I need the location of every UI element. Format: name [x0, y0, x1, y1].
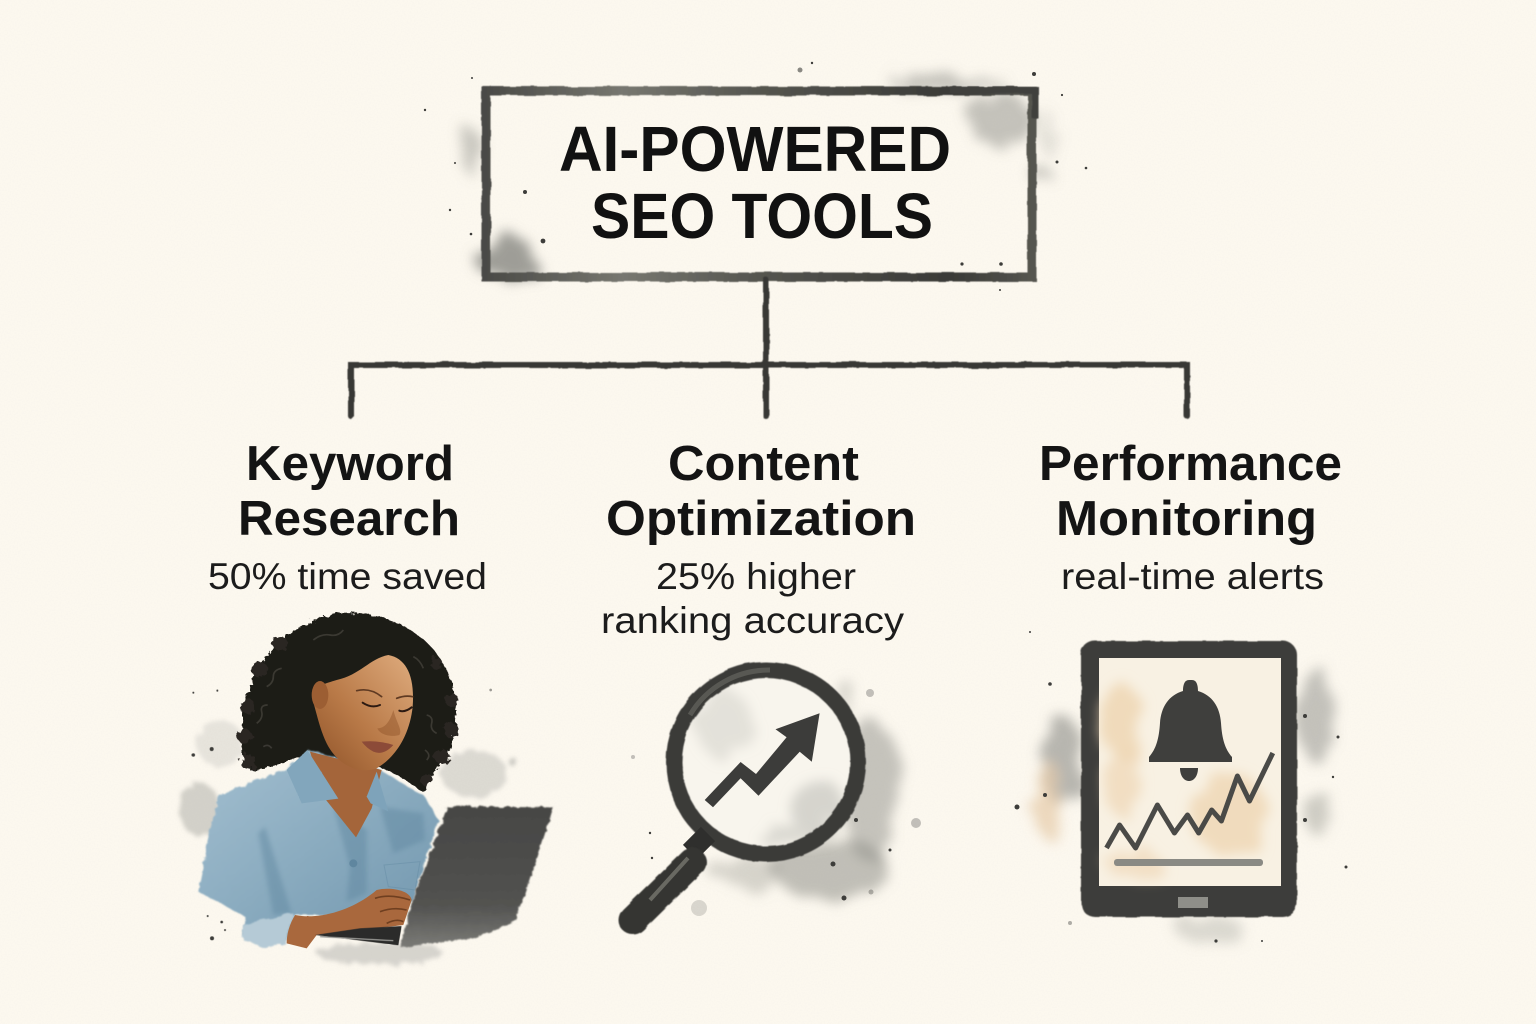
line chart	[1106, 753, 1273, 848]
heading: Monitoring	[1056, 492, 1317, 546]
shirt cuff	[243, 913, 293, 948]
splatter	[631, 689, 921, 916]
screen washes	[1104, 684, 1270, 879]
trend arrow	[705, 713, 820, 807]
lips	[362, 741, 393, 753]
heading: Keyword	[246, 437, 454, 491]
laptop key highlight	[320, 937, 393, 941]
handle	[633, 862, 692, 920]
heading: Research	[238, 492, 460, 546]
stat	[601, 556, 905, 641]
home button	[1178, 897, 1208, 908]
collar	[287, 750, 338, 803]
ring highlight	[690, 670, 770, 715]
title text second line: SEO TOOLS	[591, 180, 933, 252]
title splatter	[424, 62, 1087, 291]
tablet body	[1081, 641, 1297, 917]
shirt	[198, 750, 438, 940]
bell	[1149, 680, 1232, 762]
splatter	[1014, 631, 1348, 943]
hair highlights	[257, 630, 437, 760]
fingers	[375, 896, 410, 923]
title frame	[486, 91, 1032, 277]
title text: AI-POWERED	[559, 113, 951, 185]
heading	[606, 437, 916, 546]
splatter	[192, 689, 492, 940]
bell clapper	[1180, 768, 1198, 781]
ear	[312, 681, 328, 709]
person ink wash	[180, 720, 516, 964]
tablet ink wash	[1034, 665, 1334, 944]
illustration: tablet with bell and chart	[1014, 631, 1348, 944]
heading: Performance	[1039, 437, 1342, 491]
neck and chest	[310, 752, 382, 837]
right collar	[367, 772, 388, 811]
baseline bar	[1114, 859, 1263, 866]
stat: 50% time saved	[208, 556, 487, 597]
shirt buttons	[349, 859, 357, 867]
laptop base	[315, 926, 402, 945]
hair curl tufts	[238, 636, 458, 786]
nose shade	[377, 710, 400, 736]
face	[313, 655, 413, 770]
title box	[424, 62, 1087, 291]
stat: ranking accuracy	[601, 600, 905, 641]
heading: Content	[668, 437, 859, 491]
stat: real-time alerts	[1061, 556, 1324, 597]
connector tree	[351, 280, 1187, 416]
handle neck	[690, 834, 708, 852]
heading	[1039, 437, 1342, 546]
stat: 25% higher	[656, 556, 856, 597]
handle highlight	[650, 858, 688, 900]
eyes and brows	[357, 690, 413, 711]
column 2: content optimization	[601, 437, 916, 641]
title ink washes	[466, 78, 1058, 280]
hair	[242, 613, 456, 790]
illustration: magnifying glass	[631, 670, 921, 920]
heading: Optimization	[606, 492, 916, 546]
laptop lid	[400, 807, 553, 947]
shirt shading	[258, 807, 425, 915]
column 1: keyword research	[208, 437, 487, 597]
heading	[238, 437, 460, 546]
arm and hand	[287, 889, 412, 948]
tablet screen	[1099, 658, 1281, 886]
lens	[681, 676, 853, 848]
column 3: performance monitoring	[1039, 437, 1342, 597]
illustration: woman with laptop	[180, 613, 553, 964]
title frame dark corner	[950, 90, 1035, 118]
lens ring	[674, 670, 858, 854]
shirt pocket	[384, 862, 420, 890]
lens wash	[697, 691, 841, 843]
magnifier ink wash	[710, 680, 898, 900]
